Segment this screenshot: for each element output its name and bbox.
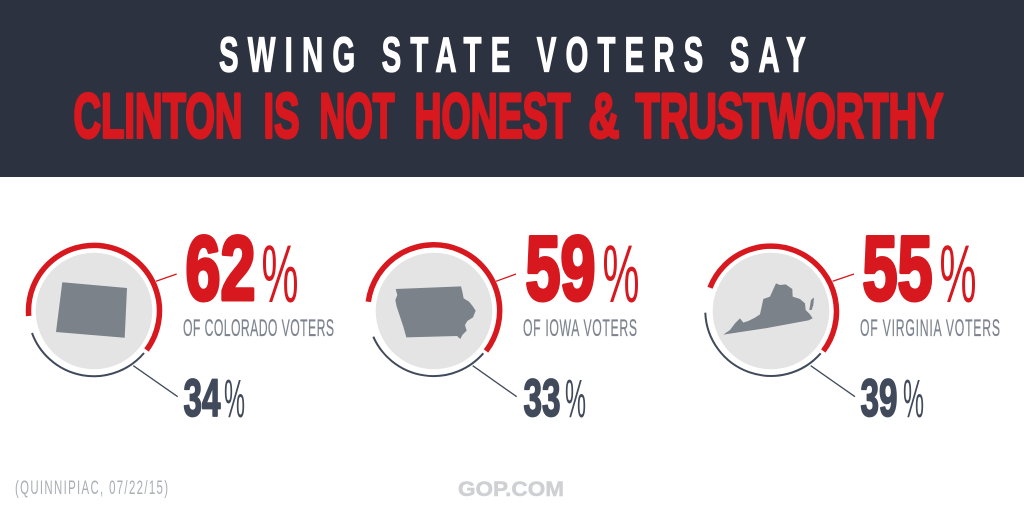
- icon: Iowa map: [395, 286, 476, 339]
- stat: 59: 59: [526, 218, 596, 320]
- leader line red: [496, 274, 516, 281]
- leader line dark: [811, 366, 855, 397]
- title line 2: NOT: [320, 82, 394, 152]
- panel: Iowa: %: [565, 369, 586, 429]
- leader line red: [833, 274, 854, 281]
- title line 2: &: [588, 82, 620, 152]
- state disc: [36, 253, 152, 369]
- icon: Colorado map: [56, 282, 127, 338]
- stat: 34: 34: [184, 369, 221, 428]
- stat: 33: 33: [524, 369, 560, 428]
- stat: 62: 62: [186, 218, 256, 320]
- title line 2: IS: [264, 82, 300, 152]
- source note: (QUINNIPIAC, 07/22/15): [15, 478, 168, 499]
- stat: 55: 55: [862, 218, 932, 320]
- ring: 39 percent: [705, 313, 821, 376]
- percent sign: %: [602, 229, 640, 320]
- ring: 59 percent: [368, 245, 500, 351]
- header band: [0, 0, 1024, 177]
- title line 2: [74, 82, 944, 152]
- ring: 33 percent: [373, 337, 483, 376]
- leader line red: [156, 274, 177, 281]
- panel: Virginia: %: [903, 369, 924, 429]
- logo: GOP.COM: GOP.COM: [458, 478, 564, 501]
- panel: Virginia: [705, 218, 1000, 429]
- panel: Colorado: [28, 218, 334, 429]
- label: OF COLORADO VOTERS: [183, 314, 334, 342]
- ring: 55 percent: [710, 246, 836, 351]
- label: OF IOWA VOTERS: [523, 314, 637, 342]
- ring: 62 percent: [28, 245, 159, 350]
- leader line dark: [473, 366, 517, 397]
- panel: Colorado: %: [224, 369, 245, 429]
- state disc: [713, 253, 829, 369]
- percent sign: %: [262, 229, 298, 320]
- title line 1: SWING STATE VOTERS SAY: [219, 27, 806, 82]
- state disc: [376, 253, 492, 369]
- leader line dark: [133, 366, 178, 397]
- label: OF VIRGINIA VOTERS: [860, 314, 1000, 342]
- icon: Virginia map: [723, 283, 814, 335]
- ring: 34 percent: [32, 333, 144, 376]
- panel: Iowa: [368, 218, 640, 429]
- title line 2: CLINTON: [74, 82, 242, 152]
- percent sign: %: [940, 229, 976, 320]
- stat: 39: 39: [860, 369, 898, 428]
- title line 2: HONEST: [414, 82, 570, 152]
